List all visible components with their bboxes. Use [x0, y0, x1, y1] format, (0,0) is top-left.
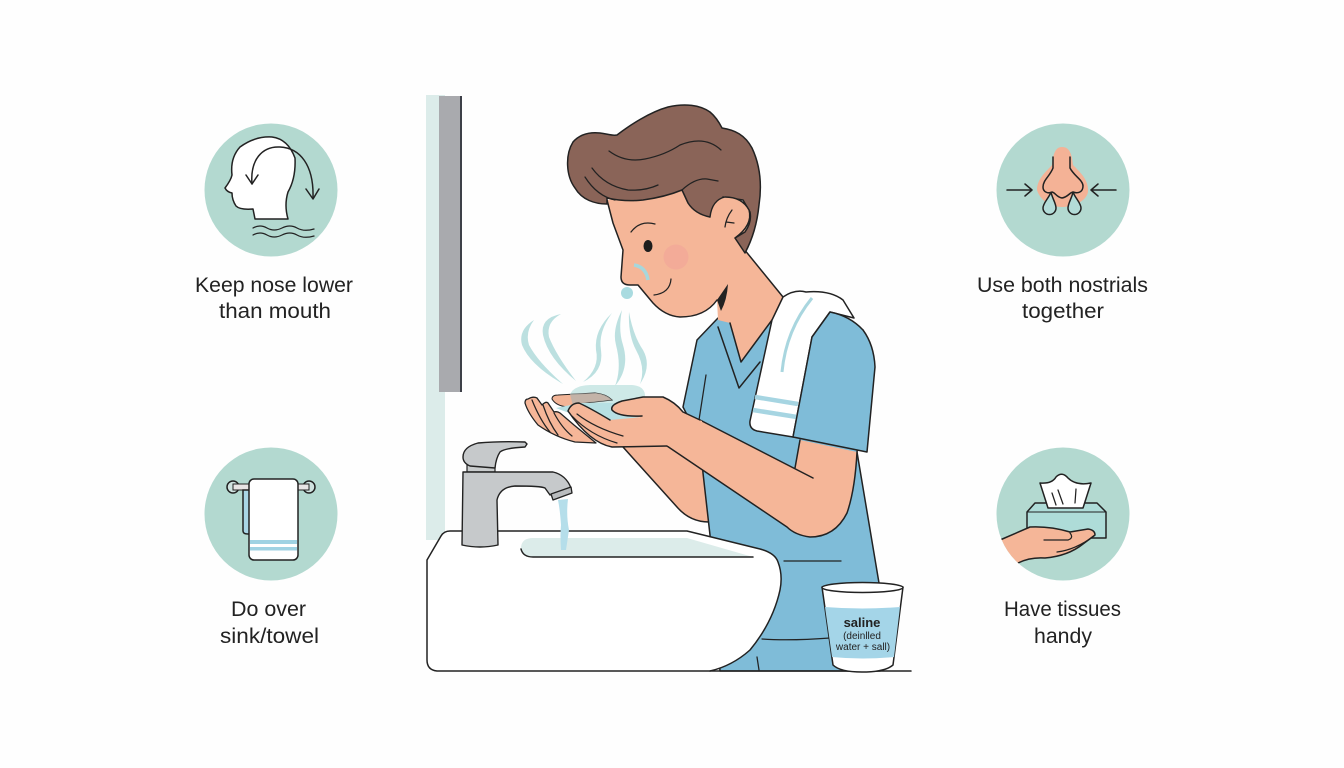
towel on shoulder — [750, 291, 854, 437]
steam wisps — [521, 310, 647, 386]
cup label: (deinlled — [843, 631, 881, 642]
caption: do over sink/towel — [220, 598, 319, 648]
head — [568, 105, 760, 317]
near arm — [640, 403, 857, 537]
counter line — [710, 670, 911, 672]
shirt torso — [683, 312, 880, 671]
short sleeve — [793, 312, 875, 452]
panel: main illustration — [426, 95, 911, 672]
icon: hand holding tissue box — [995, 448, 1130, 580]
caption: have tissues handy — [1004, 598, 1121, 648]
icon: towel on rail — [204, 448, 338, 580]
saline at nose — [634, 265, 648, 280]
water in palm — [556, 403, 642, 421]
panel: use both nostrils together — [977, 124, 1148, 323]
caption: do over sink/towel: Do over — [231, 598, 306, 621]
icon: nose with two drops and arrows — [996, 124, 1130, 256]
cup of saline — [822, 582, 903, 672]
shirt seam lines — [699, 375, 841, 670]
cupped hands with water — [525, 385, 702, 447]
panel: keep nose lower than mouth — [195, 124, 353, 323]
caption: have tissues handy: handy — [1034, 625, 1093, 648]
infographic canvas — [196, 95, 1148, 673]
caption: keep nose lower than mouth: than mouth — [219, 300, 331, 323]
caption: use both nostrils together: Use both nostrials — [977, 274, 1148, 297]
caption: keep nose lower than mouth: Keep nose lower — [195, 274, 353, 297]
mirror on wall — [426, 95, 462, 540]
panel: have tissues handy — [995, 448, 1130, 648]
sink and basin — [427, 531, 911, 671]
caption: have tissues handy: Have tissues — [1004, 598, 1121, 621]
cup label: saline — [844, 615, 880, 630]
caption: use both nostrils together: together — [1022, 300, 1104, 323]
near hand — [568, 397, 702, 447]
person rinsing nose — [521, 105, 880, 671]
cup label — [835, 615, 890, 653]
basin water — [521, 538, 753, 557]
tap with running water — [462, 442, 572, 550]
caption: use both nostrils together — [977, 274, 1148, 323]
far arm — [623, 444, 709, 522]
cup label: water + sall) — [835, 642, 890, 653]
caption: do over sink/towel: sink/towel — [220, 625, 319, 648]
neck — [700, 238, 783, 362]
far thumb — [552, 393, 612, 407]
far hand fingers — [525, 397, 596, 443]
panel: do over sink or towel — [204, 448, 338, 648]
icon: head with arrow and water — [204, 124, 338, 256]
caption: keep nose lower than mouth — [195, 274, 353, 323]
